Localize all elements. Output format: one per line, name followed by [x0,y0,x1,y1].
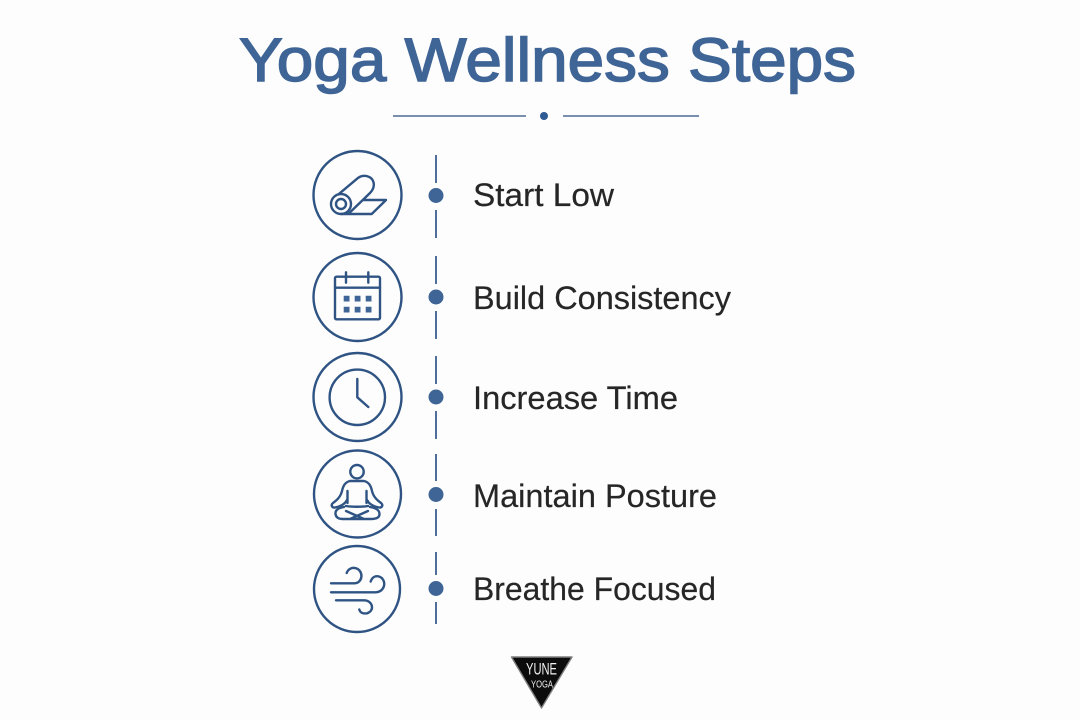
title: Yoga Wellness Steps [239,26,856,94]
label: Build Consistency [473,280,731,316]
connector and dot [428,454,444,536]
label: Start Low [473,177,615,213]
logo: Yune Yoga [512,657,572,708]
icon: meditating person [314,450,401,538]
step 2: build consistency [314,253,731,341]
step 4: maintain posture [314,450,717,538]
logo: Yune Yoga: YOGA [531,680,553,690]
label: Increase Time [473,380,678,416]
step 1: start low [314,151,615,239]
title divider [393,112,699,120]
connector and dot [428,155,444,238]
step 3: increase time [314,353,678,441]
connector and dot [428,356,444,439]
label: Maintain Posture [473,478,717,514]
connector and dot [428,256,444,339]
icon: clock [314,353,402,441]
connector and dot [428,552,444,624]
step 5: breathe focused [314,546,716,632]
logo: Yune Yoga: YUNE [526,660,557,678]
icon: wind [314,546,400,632]
label: Breathe Focused [473,571,716,607]
icon: calendar [314,253,402,341]
icon: yoga mat [314,151,402,239]
